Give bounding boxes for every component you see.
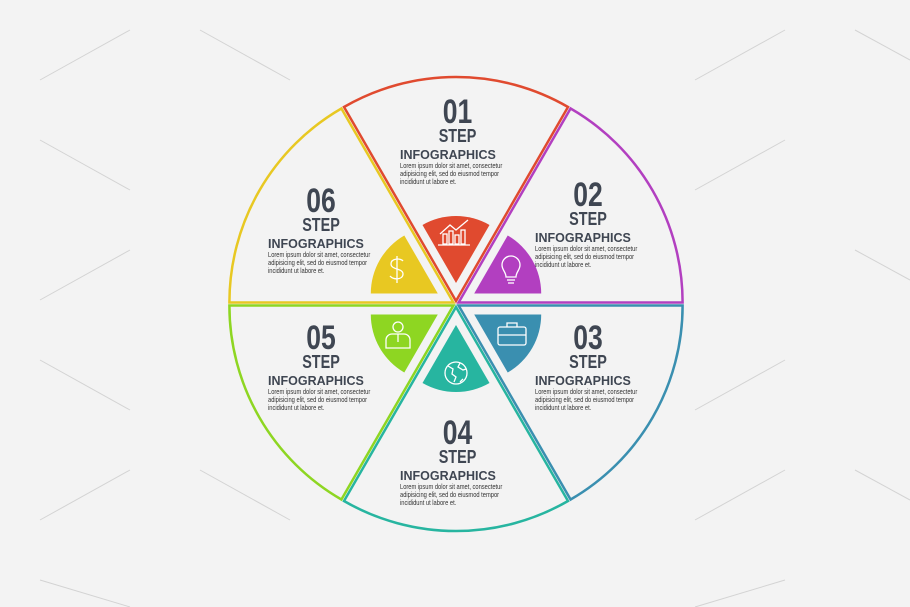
- text block 06: 06: [306, 182, 336, 220]
- text block 02: adipisicing elit, sed do eiusmod tempor: [535, 252, 634, 261]
- sector outline 04: [344, 307, 568, 531]
- text block 04: INFOGRAPHICS: [400, 469, 496, 483]
- text block 04: [400, 414, 502, 507]
- text block 02: 02: [573, 176, 603, 214]
- text block 04: incididunt ut labore et.: [400, 498, 456, 507]
- text block 02: incididunt ut labore et.: [535, 260, 591, 269]
- text block 04: adipisicing elit, sed do eiusmod tempor: [400, 490, 499, 499]
- wedge 05 green with person icon: [371, 314, 438, 372]
- text block 01: 01: [443, 93, 472, 131]
- text block 05: adipisicing elit, sed do eiusmod tempor: [268, 395, 367, 404]
- text block 01: incididunt ut labore et.: [400, 177, 456, 186]
- wedge 03 blue with briefcase icon: [474, 314, 541, 372]
- text block 03: INFOGRAPHICS: [535, 374, 631, 388]
- text block 01: INFOGRAPHICS: [400, 148, 496, 162]
- text block 03: 03: [573, 319, 603, 357]
- sector outline 02: [459, 108, 683, 302]
- text block 02: STEP: [569, 209, 607, 229]
- text block 05: INFOGRAPHICS: [268, 374, 364, 388]
- sector outline 06: [229, 108, 453, 302]
- text block 06: adipisicing elit, sed do eiusmod tempor: [268, 258, 367, 267]
- text block 03: incididunt ut labore et.: [535, 403, 591, 412]
- text block 02: Lorem ipsum dolor sit amet, consectetur: [535, 244, 637, 253]
- text block 01: adipisicing elit, sed do eiusmod tempor: [400, 169, 499, 178]
- sector outline 01: [344, 77, 568, 301]
- text block 03: adipisicing elit, sed do eiusmod tempor: [535, 395, 634, 404]
- text block 01: Lorem ipsum dolor sit amet, consectetur: [400, 161, 502, 170]
- text block 05: Lorem ipsum dolor sit amet, consectetur: [268, 387, 370, 396]
- text block 06: STEP: [302, 215, 340, 235]
- text block 05: 05: [306, 319, 336, 357]
- text block 06: [268, 182, 370, 275]
- text block 06: INFOGRAPHICS: [268, 237, 364, 251]
- text block 03: [535, 319, 638, 412]
- text block 06: incididunt ut labore et.: [268, 266, 324, 275]
- wedge 06 yellow with dollar icon: [371, 236, 438, 294]
- sector outline 03: [459, 306, 683, 500]
- wedge 01 red with chart icon: [422, 216, 490, 283]
- sector outline 05: [229, 306, 453, 500]
- text block 05: STEP: [302, 352, 340, 372]
- text block 02: INFOGRAPHICS: [535, 231, 631, 245]
- text block 06: Lorem ipsum dolor sit amet, consectetur: [268, 250, 370, 259]
- text block 01: STEP: [439, 126, 476, 146]
- text block 04: Lorem ipsum dolor sit amet, consectetur: [400, 482, 502, 491]
- text block 01: [400, 93, 502, 186]
- text block 04: STEP: [439, 447, 476, 467]
- wedge 02 purple with bulb icon: [474, 236, 541, 294]
- text block 04: 04: [443, 414, 472, 452]
- text block 02: [535, 176, 638, 269]
- text block 03: Lorem ipsum dolor sit amet, consectetur: [535, 387, 637, 396]
- text block 05: incididunt ut labore et.: [268, 403, 324, 412]
- wedge 04 teal with globe icon: [422, 325, 490, 392]
- text block 03: STEP: [569, 352, 607, 372]
- text block 05: [268, 319, 370, 412]
